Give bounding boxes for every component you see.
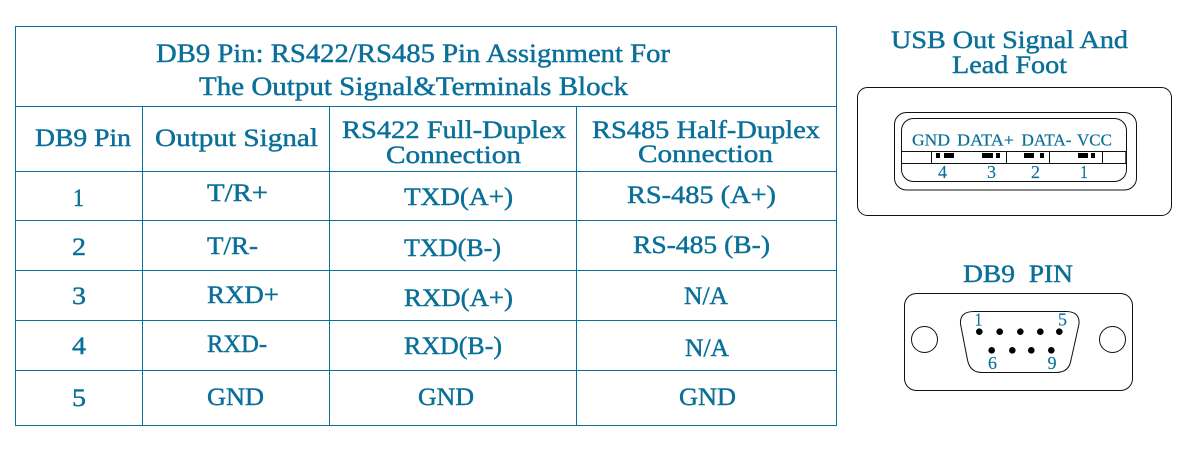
signal labels: VCC <box>1077 130 1112 150</box>
pin labels <box>974 310 1067 373</box>
row 3: N/A <box>684 281 729 310</box>
header row: Connection <box>638 139 773 168</box>
row 2: TXD(B-) <box>404 233 501 262</box>
table title: The Output Signal&Terminals Block <box>199 72 628 101</box>
signal labels <box>912 130 1112 150</box>
table: DB9 pin assignment <box>16 26 836 426</box>
heading: DB9 pin: DB9 PIN <box>963 259 1073 288</box>
header row <box>35 115 820 169</box>
table title: DB9 Pin: RS422/RS485 Pin Assignment For <box>156 39 670 68</box>
row 3: RXD+ <box>207 280 279 309</box>
row 2: RS-485 (B-) <box>633 230 770 259</box>
heading: USB out signal: Lead Foot <box>952 50 1067 79</box>
header row: RS485 Half-Duplex <box>592 115 820 144</box>
row 3: RXD(A+) <box>404 283 513 312</box>
signal labels: DATA+ <box>957 130 1014 150</box>
header row: Output Signal <box>155 123 318 152</box>
pin labels: 5 <box>1058 310 1067 330</box>
pin labels: 1 <box>974 310 982 330</box>
row 4: RXD- <box>207 329 267 358</box>
signal labels: GND <box>912 130 950 150</box>
row 1: TXD(A+) <box>404 182 513 211</box>
row 2: T/R- <box>207 231 258 260</box>
row 3 <box>72 280 729 312</box>
row 4: RXD(B-) <box>404 331 502 360</box>
row 5: 5 <box>72 383 86 412</box>
row 4 <box>72 329 730 362</box>
row 3: 3 <box>72 281 86 310</box>
header row: DB9 Pin <box>35 123 131 152</box>
row 5: GND <box>679 382 736 411</box>
signal labels: DATA- <box>1022 130 1072 150</box>
row 2 <box>72 230 770 262</box>
diagram: USB connector <box>858 88 1172 216</box>
heading: USB out signal <box>891 25 1128 79</box>
row 1: T/R+ <box>207 178 268 207</box>
pin labels: 9 <box>1048 353 1056 373</box>
row 2: 2 <box>72 232 86 261</box>
pins <box>976 328 1063 354</box>
row 5 <box>72 382 736 412</box>
pin numbers: 1 <box>1080 162 1088 182</box>
row 4: 4 <box>72 331 86 360</box>
header row: Connection <box>386 140 521 169</box>
pin labels: 6 <box>988 353 997 373</box>
header row: RS422 Full-Duplex <box>342 115 566 144</box>
row 5: GND <box>418 382 474 411</box>
row 1: 1 <box>73 183 84 212</box>
row 4: N/A <box>685 333 730 362</box>
table grid <box>16 26 836 426</box>
pin numbers: 2 <box>1031 162 1040 182</box>
diagram: DB9 connector <box>904 294 1132 390</box>
pin numbers <box>938 162 1088 182</box>
row 1 <box>73 178 776 212</box>
pin numbers: 3 <box>987 162 996 182</box>
heading: USB out signal: USB Out Signal And <box>891 25 1128 54</box>
row 5: GND <box>207 382 264 411</box>
table title <box>156 39 670 101</box>
row 1: RS-485 (A+) <box>627 180 776 209</box>
contact pads <box>936 153 1095 158</box>
pin numbers: 4 <box>938 162 947 182</box>
